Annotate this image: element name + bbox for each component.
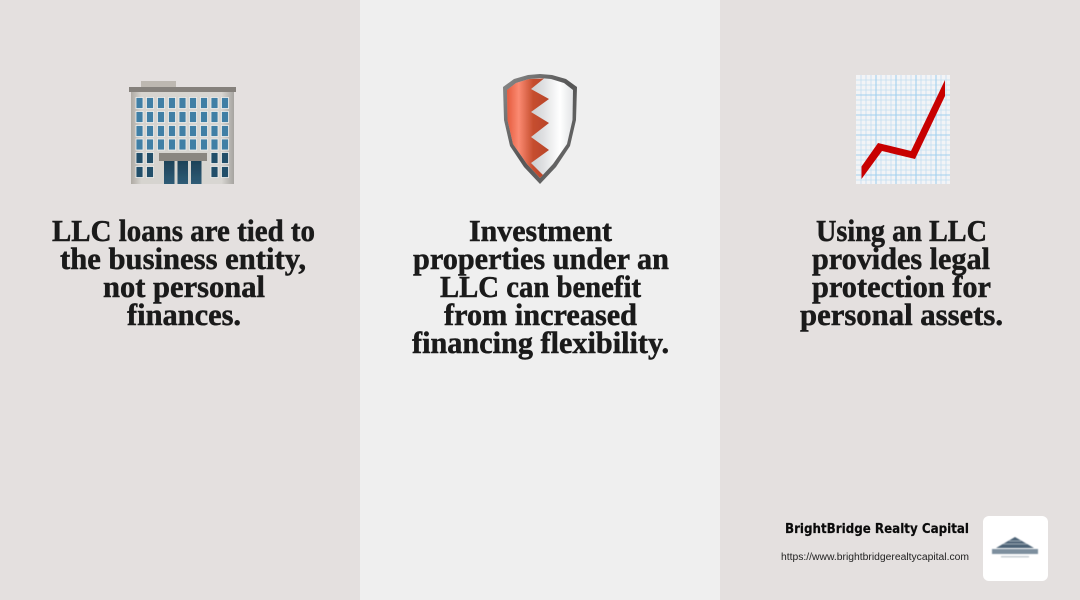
heading: center column: properties under an	[413, 241, 669, 276]
heading: right column: provides legal	[812, 241, 990, 276]
heading: left column: not personal	[103, 269, 265, 304]
heading: center column: Investment	[469, 213, 613, 248]
heading: right column: personal assets.	[800, 297, 1003, 332]
heading: left column: the business entity,	[60, 241, 306, 276]
heading: right column: Using an LLC	[816, 213, 987, 248]
brand name: BrightBridge Realty Capital	[785, 522, 969, 537]
icon: chart with upward trend	[856, 75, 950, 184]
icon: office building	[129, 81, 236, 184]
heading: right column: protection for	[812, 269, 991, 304]
panel: right column background	[720, 0, 1080, 600]
heading: center column: LLC can benefit	[440, 269, 642, 304]
logo card	[983, 516, 1048, 581]
panel: left column background	[0, 0, 360, 600]
heading: center column: financing flexibility.	[412, 325, 669, 360]
icon: logo building	[992, 537, 1038, 558]
heading: left column: LLC loans are tied to	[52, 213, 315, 248]
icon: shield	[503, 74, 577, 184]
heading: right column	[800, 213, 1003, 332]
panel: center column background	[360, 0, 720, 600]
heading: center column: from increased	[444, 297, 637, 332]
website url: https://www.brightbridgerealtycapital.com	[781, 552, 969, 563]
heading: left column: finances.	[127, 297, 241, 332]
heading: center column	[412, 213, 669, 360]
heading: left column	[52, 213, 315, 332]
